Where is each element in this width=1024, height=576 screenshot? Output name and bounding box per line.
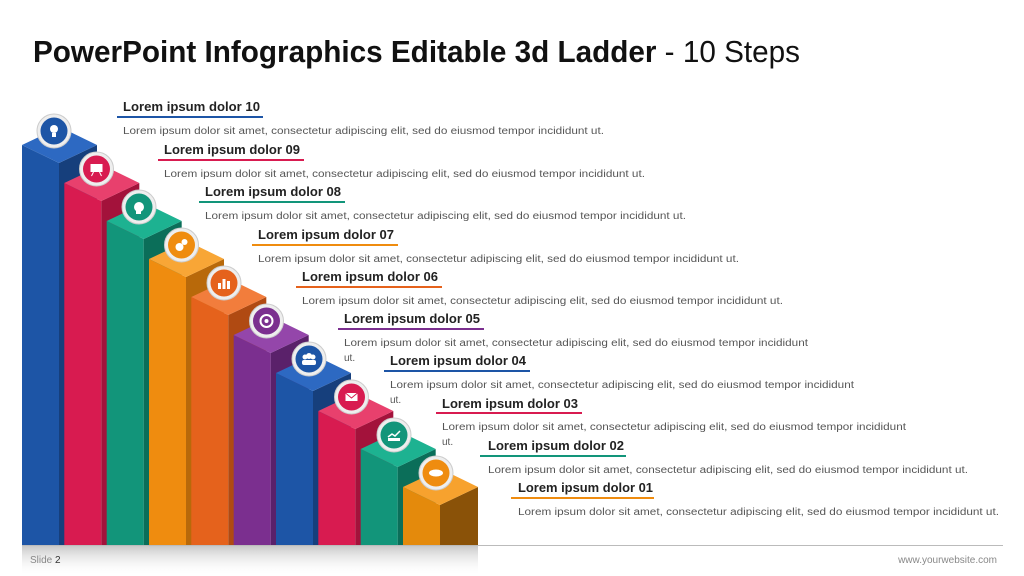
step 10 text: Lorem ipsum dolor sit amet, consectetur adipiscing elit, sed do eiusmod tempor incididunt ut. [123, 126, 604, 137]
icon 9: board [80, 152, 114, 186]
step 4 text: Lorem ipsum dolor sit amet, consectetur adipiscing elit, sed do eiusmod tempor incididunt [390, 380, 854, 391]
step 3 text: ut. [442, 437, 453, 448]
icon 4: team [292, 342, 326, 376]
icon 7: gears [164, 228, 198, 262]
icon 6: chart [207, 266, 241, 300]
icon 10: bulb [37, 114, 71, 148]
footer: www.yourwebsite.com [897, 555, 997, 566]
bar 8 [107, 203, 182, 545]
icon 3: mail [334, 380, 368, 414]
step 5 text: Lorem ipsum dolor 05 [344, 311, 480, 326]
bar 9 [64, 165, 139, 545]
step 6 text [296, 269, 783, 307]
icons [37, 114, 453, 490]
step 10 text: Lorem ipsum dolor 10 [123, 99, 260, 114]
step 2 text [480, 438, 968, 476]
step 5 text: Lorem ipsum dolor sit amet, consectetur adipiscing elit, sed do eiusmod tempor incididunt [344, 338, 808, 349]
step 6 text: Lorem ipsum dolor 06 [302, 269, 438, 284]
bar 10 [22, 127, 97, 545]
step 1 text [511, 480, 999, 518]
title: PowerPoint Infographics Editable 3d Ladder - 10 Steps [33, 34, 800, 69]
bar 2 [361, 431, 436, 545]
bar 4 [276, 355, 351, 545]
step 3 text: Lorem ipsum dolor 03 [442, 396, 578, 411]
step 3 text [436, 396, 906, 448]
icon 5: target [250, 304, 284, 338]
step 2 text: Lorem ipsum dolor sit amet, consectetur adipiscing elit, sed do eiusmod tempor incididunt ut. [488, 465, 968, 476]
reflection shadow [22, 546, 478, 576]
text blocks [117, 99, 999, 518]
step 7 text: Lorem ipsum dolor sit amet, consectetur adipiscing elit, sed do eiusmod tempor incididunt ut. [258, 254, 739, 265]
step 2 text: Lorem ipsum dolor 02 [488, 438, 624, 453]
bar 1 [403, 469, 478, 545]
step 8 text [199, 184, 686, 222]
step 7 text: Lorem ipsum dolor 07 [258, 227, 394, 242]
step 9 text: Lorem ipsum dolor 09 [164, 142, 300, 157]
icon 2: growth chart [377, 418, 411, 452]
step 7 text [252, 227, 739, 265]
step 5 text [338, 311, 808, 364]
footer: Slide 2 [30, 555, 61, 566]
step 8 text: Lorem ipsum dolor sit amet, consectetur adipiscing elit, sed do eiusmod tempor incididunt ut. [205, 211, 686, 222]
step 9 text [158, 142, 645, 180]
step 9 text: Lorem ipsum dolor sit amet, consectetur adipiscing elit, sed do eiusmod tempor incididunt ut. [164, 169, 645, 180]
step 10 text [117, 99, 604, 137]
step 6 text: Lorem ipsum dolor sit amet, consectetur adipiscing elit, sed do eiusmod tempor incididunt ut. [302, 296, 783, 307]
bar 6 [191, 279, 266, 545]
step 4 text [384, 353, 854, 406]
ladder bars [22, 127, 478, 545]
bar 5 [234, 317, 309, 545]
bar 7 [149, 241, 224, 545]
step 4 text: Lorem ipsum dolor 04 [390, 353, 527, 368]
step 3 text: Lorem ipsum dolor sit amet, consectetur adipiscing elit, sed do eiusmod tempor incididunt [442, 422, 906, 433]
step 4 text: ut. [390, 395, 401, 406]
icon 1: handshake [419, 456, 453, 490]
step 1 text: Lorem ipsum dolor 01 [518, 480, 653, 495]
icon 8: head [122, 190, 156, 224]
bar 3 [318, 393, 393, 545]
footer [22, 545, 1003, 566]
step 5 text: ut. [344, 353, 355, 364]
step 8 text: Lorem ipsum dolor 08 [205, 184, 341, 199]
step 1 text: Lorem ipsum dolor sit amet, consectetur adipiscing elit, sed do eiusmod tempor incididunt ut. [518, 507, 999, 518]
